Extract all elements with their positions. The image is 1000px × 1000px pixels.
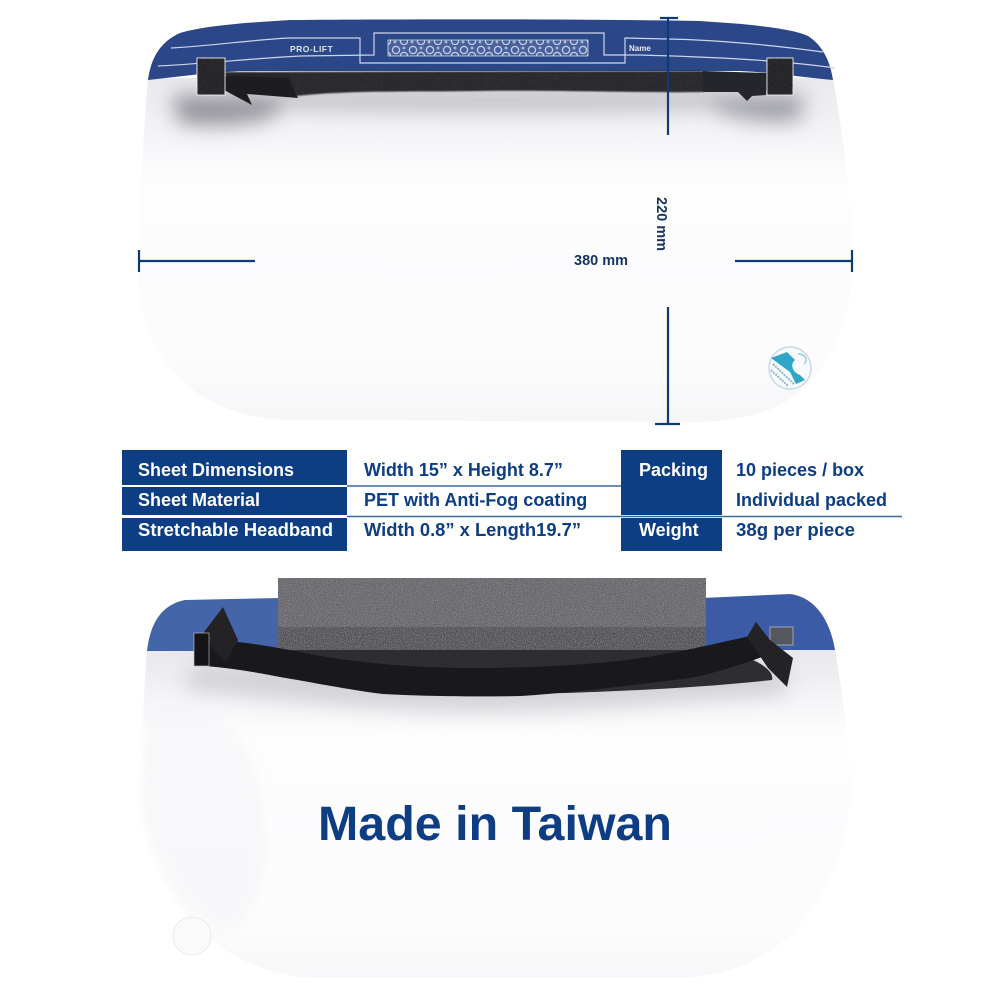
left header cells (122, 450, 347, 551)
round sticker (769, 347, 811, 389)
value: individual packed: Individual packed (736, 490, 887, 510)
elastic strap (205, 634, 775, 696)
panel: top face shield (138, 19, 852, 422)
left strap tab (204, 607, 238, 662)
dimension: 380 mm width (139, 250, 852, 272)
name label: Name (629, 44, 651, 53)
value: material: PET with Anti-Fog coating (364, 490, 587, 510)
dark sheet band under foam (290, 650, 772, 695)
soft shadow under strap (185, 665, 790, 713)
label: headband: Stretchable Headband (138, 520, 333, 540)
left clip (194, 633, 209, 666)
value: headband: Width 0.8” x Length19.7” (364, 520, 581, 540)
label: sheet material: Sheet Material (138, 490, 260, 510)
dimension: 220 mm height (653, 18, 680, 424)
strap fold right (703, 71, 768, 101)
blue band left (147, 598, 280, 651)
right clip (767, 58, 793, 95)
strap fold left (224, 76, 298, 105)
made in taiwan text: Made in Taiwan (318, 798, 672, 851)
right header cells (621, 450, 722, 551)
clear sheet (138, 78, 852, 422)
value: dimensions: Width 15” x Height 8.7” (364, 460, 563, 480)
panel: specification table (122, 450, 902, 551)
clear round sticker (173, 917, 211, 955)
value: pieces per box: 10 pieces / box (736, 460, 864, 480)
foam strip (224, 71, 706, 96)
right strap tab (747, 622, 793, 687)
label: weight: Weight (639, 520, 699, 540)
label: sheet dimensions: Sheet Dimensions (138, 460, 294, 480)
clear sheet (142, 650, 850, 978)
blue band right (702, 594, 835, 650)
height label: 220 mm (653, 197, 669, 251)
right clip (770, 627, 793, 645)
brand label: PRO-LIFT (290, 44, 333, 54)
faint lens reflection (142, 699, 265, 935)
gear pattern strip (388, 40, 588, 56)
width label: 380 mm (574, 253, 628, 269)
soft shadow under headband (172, 90, 805, 125)
panel: bottom face shield (142, 578, 850, 978)
row rule (347, 486, 902, 516)
left clip (197, 58, 225, 95)
value: weight: 38g per piece (736, 520, 855, 540)
label: packing: Packing (639, 460, 708, 480)
foam block (278, 578, 706, 651)
band white lines (158, 33, 835, 68)
blue printed band (148, 19, 833, 80)
